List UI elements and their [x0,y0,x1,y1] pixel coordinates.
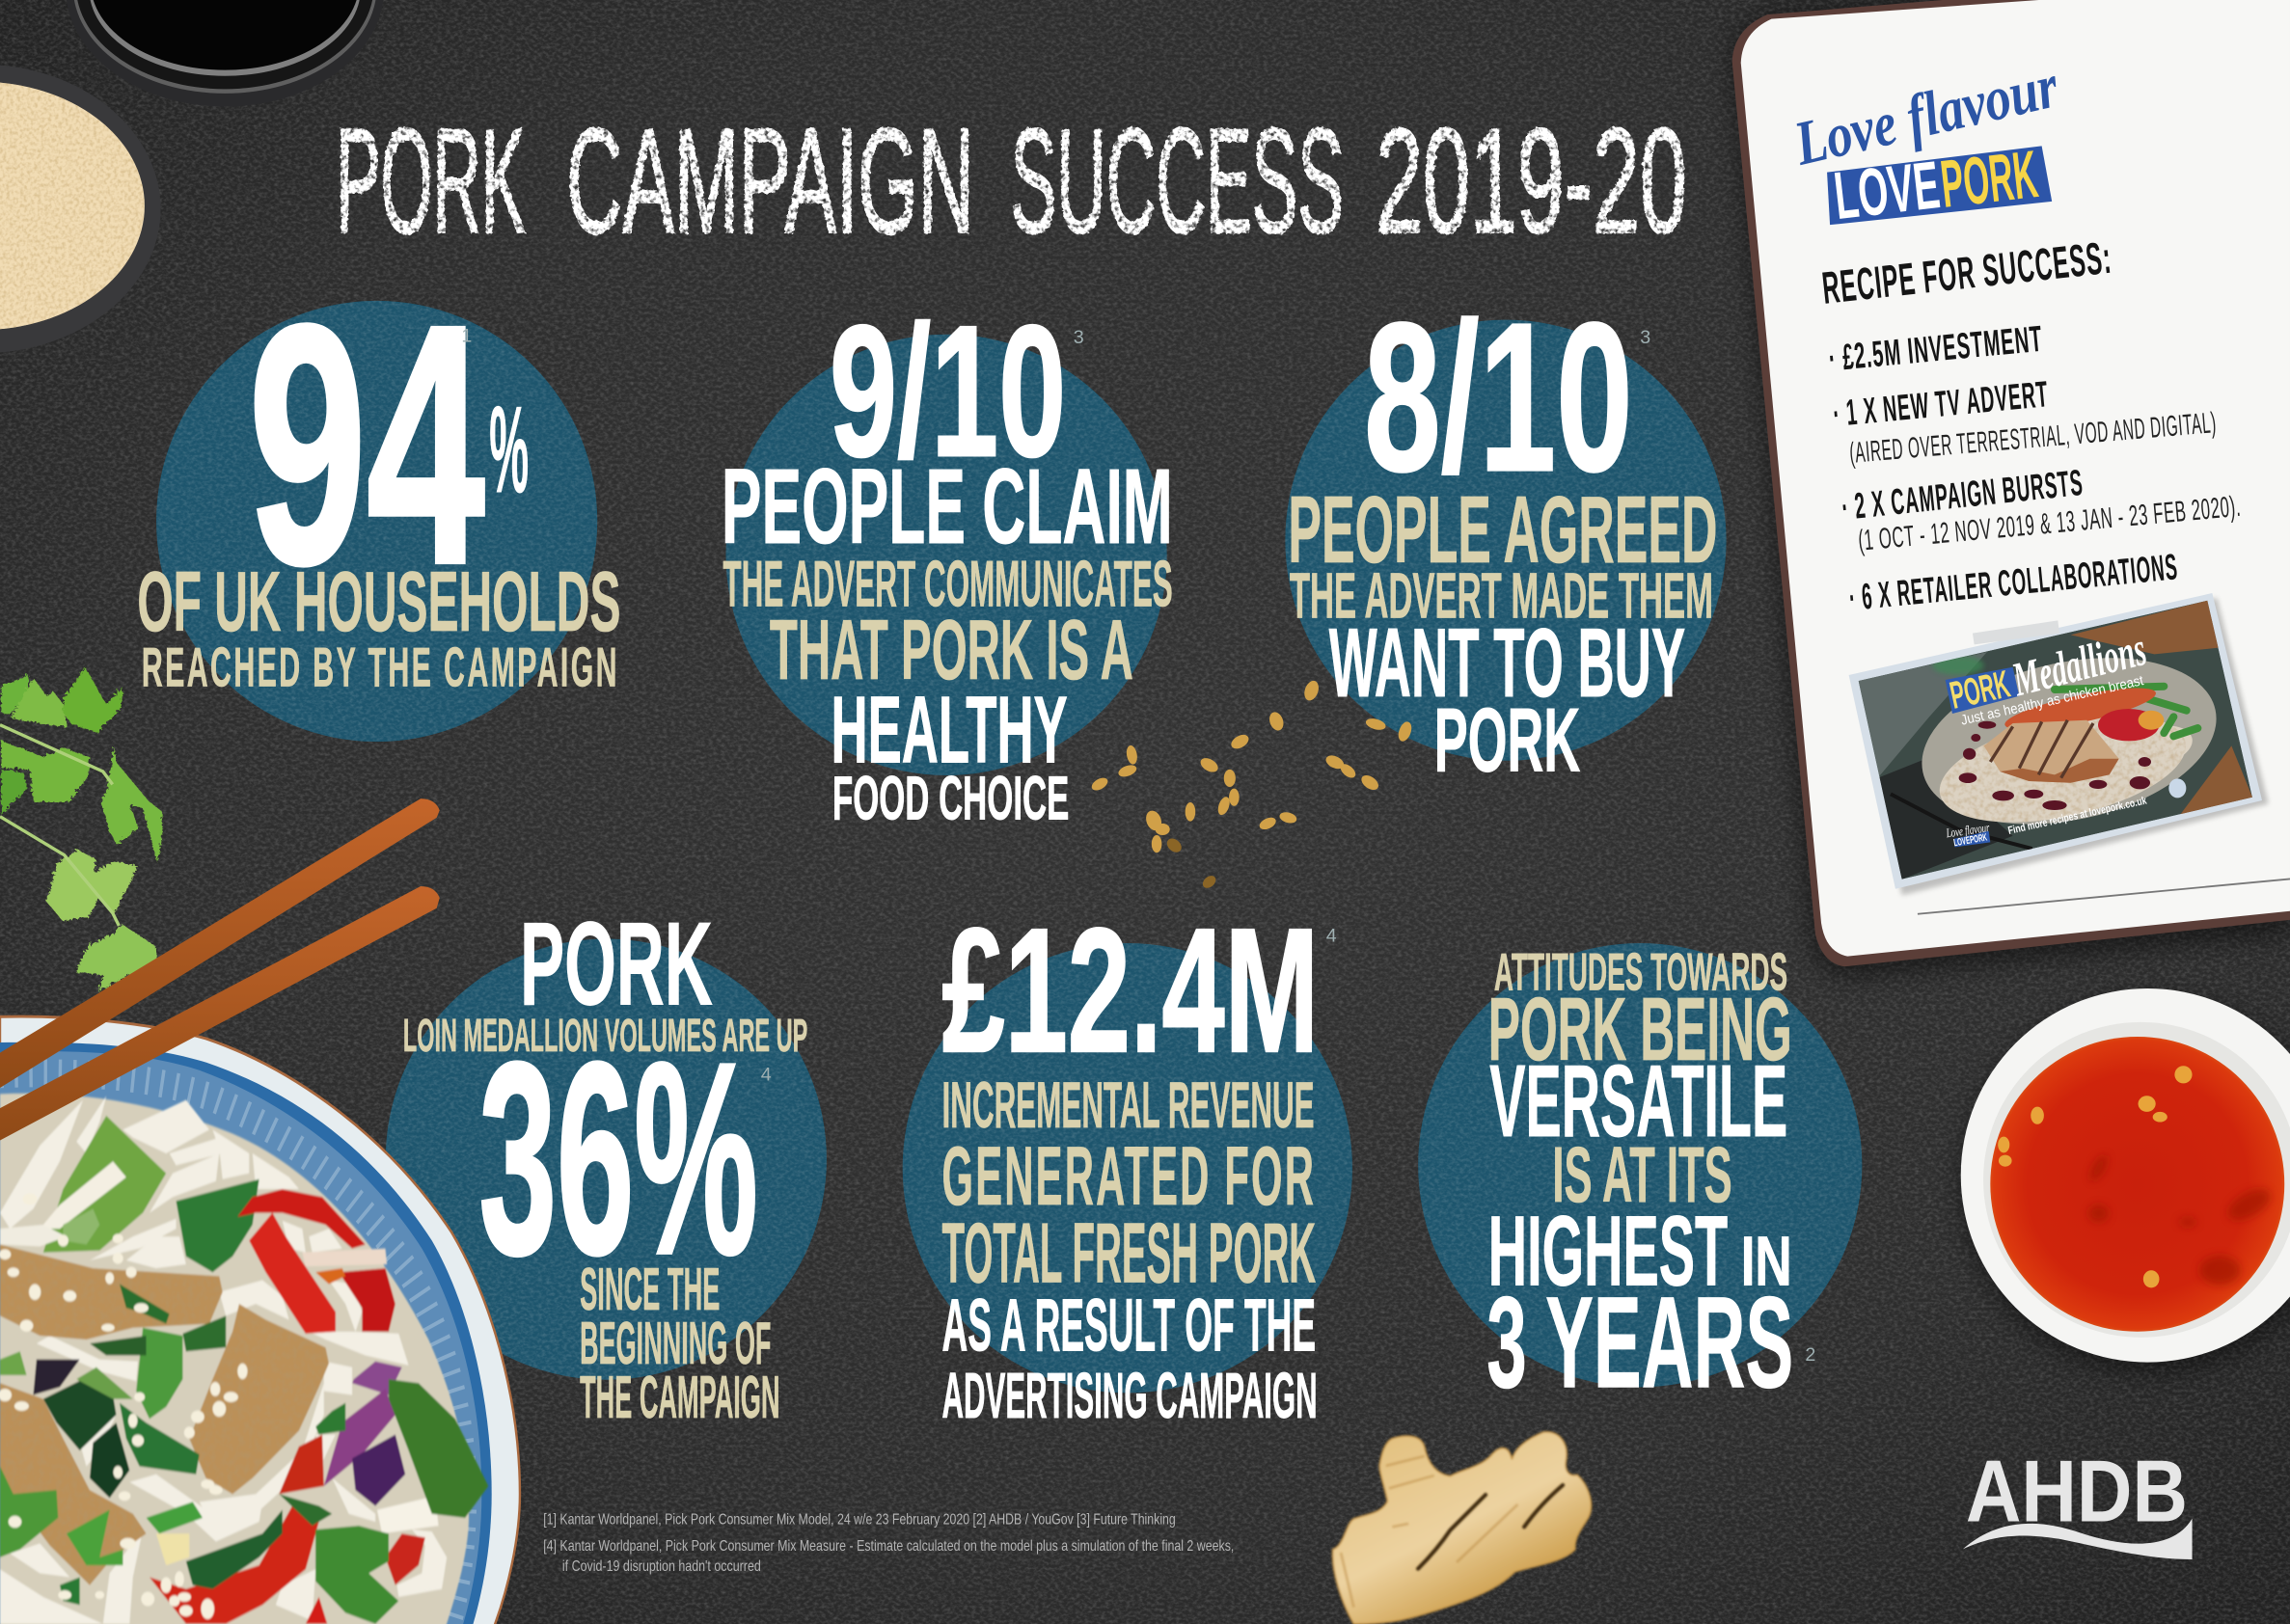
stat panel: pork loin medallions up 36%: SINCE THE [580,1257,720,1323]
handwritten recipe list: · 1 X NEW TV ADVERT [1832,374,2051,435]
title [336,97,1687,264]
stat panel: versatile attitudes: IN [1741,1222,1792,1300]
footnotes: [1] Kantar Worldpanel, Pick Pork Consumer Mix Model, 24 w/e 23 February 2020 [2] AHDB / YouGov [3] Future Thinking [543,1512,1176,1529]
stat panel: versatile attitudes: VERSATILE [1489,1044,1787,1158]
stat panel: 8/10 want to buy: PORK [1434,689,1580,790]
taped recipe photo: Just as healthy as chicken breast [1959,673,2145,729]
handwritten recipe list [1819,232,2243,619]
handwritten recipe list: · £2.5M INVESTMENT [1827,319,2044,380]
stat panel: £12.4M incremental revenue: £12.4M [942,891,1319,1089]
taped recipe photo: Medallions [2006,621,2151,707]
brand logo: Love Flavour Love Pork: PORK [1937,136,2041,222]
stat panel: 8/10 want to buy [1288,279,1717,790]
stat panel: 94% of UK households: REACHED BY THE CAMPAIGN [142,637,619,699]
stat panel: 8/10 want to buy: PEOPLE AGREED [1288,476,1717,582]
text: INCREMENTAL REVENUE [942,1069,1315,1142]
brand logo: Love Flavour Love Pork: LOVE [1831,147,1944,233]
stat panel: versatile attitudes: HIGHEST [1488,1195,1728,1306]
stat panel: 8/10 want to buy: WANT TO BUY [1329,609,1685,717]
stat panel: versatile attitudes: PORK BEING [1488,979,1792,1079]
footnotes [543,1512,1234,1575]
stat panel: £12.4M incremental revenue: 4 [1326,926,1337,947]
stat panel: 9/10 healthy: 9/10 [830,287,1066,496]
stat panel: 9/10 healthy: PEOPLE CLAIM [722,447,1173,566]
title: PORK [336,97,526,264]
stat panel: versatile attitudes: 2 [1805,1344,1815,1366]
peppers [339,1268,395,1332]
footnotes: [4] Kantar Worldpanel, Pick Pork Consumer Mix Measure - Estimate calculated on the model plus a simulation of the final 2 weeks, [543,1538,1234,1555]
greens [43,1116,166,1253]
taped recipe photo: Love flavour [1945,820,1991,840]
text: TOTAL FRESH PORK [942,1205,1316,1300]
title: SUCCESS [1011,97,1344,264]
AHDB logo: AHDB [1966,1444,2188,1541]
stat panel: pork loin medallions up 36%: 4 [761,1064,772,1085]
stat panel: pork loin medallions up 36%: 36% [479,1006,758,1311]
icon: sesame seed bowl [0,65,161,353]
icon: chopsticks [0,798,440,1140]
pork [0,1244,329,1585]
brand logo: Love Flavour Love Pork [1787,51,2065,233]
stat panel: £12.4M incremental revenue: AS A RESULT OF THE [942,1284,1316,1367]
title: CAMPAIGN [566,97,974,264]
text: THE ADVERT COMMUNICATES [722,547,1173,620]
icon: sweet chilli sauce bowl [1960,988,2290,1374]
text: THE CAMPAIGN [580,1365,779,1431]
stat panel: 94% of UK households: 94 [248,255,486,635]
stat panel: 94% of UK households: % [489,381,529,518]
text: LOIN MEDALLION VOLUMES ARE UP [403,1010,807,1062]
stat panel: 9/10 healthy: THAT PORK IS A [770,603,1133,697]
stat panel: versatile attitudes: ATTITUDES TOWARDS [1494,943,1787,1002]
stat panel: £12.4M incremental revenue [942,891,1337,1432]
sesame seeds [0,1194,248,1619]
stat panel: 9/10 healthy: HEALTHY [831,676,1068,782]
taped recipe photo: PORK [1947,663,2014,717]
stat panel: 94% of UK households [137,255,620,699]
stat panel: versatile attitudes [1486,943,1815,1415]
stat panel: pork loin medallions up 36%: BEGINNING OF [580,1311,771,1377]
stat panel: 8/10 want to buy: 3 [1640,327,1650,348]
stat panel: 8/10 want to buy: THE ADVERT MADE THEM [1290,560,1713,632]
stat panel: pork loin medallions up 36%: PORK [520,898,713,1030]
stat panel: versatile attitudes: IS AT ITS [1552,1131,1732,1219]
teal background circles [156,301,1862,1393]
stat panel: pork loin medallions up 36% [403,898,807,1431]
taped recipe photo: Find more recipes at lovepork.co.uk [2007,795,2148,837]
title: 2019-20 [1376,97,1687,264]
stat panel: 9/10 healthy: FOOD CHOICE [832,764,1069,832]
taped recipe photo: LOVEPORK [1952,831,1988,849]
stat panel: 9/10 healthy [722,287,1173,832]
icon: noodle bowl [0,1016,520,1624]
icon: soy sauce dish [66,0,384,107]
stat panel: 94% of UK households: OF UK HOUSEHOLDS [137,555,620,649]
brand logo: Love Flavour Love Pork: Love flavour [1787,51,2065,179]
footnotes: if Covid-19 disruption hadn't occurred [562,1558,761,1575]
stat panel: £12.4M incremental revenue: GENERATED FOR [942,1130,1316,1223]
notebook [1732,0,2290,978]
stat panel: 9/10 healthy: 3 [1074,327,1084,348]
icon: ginger root [1333,1432,1591,1624]
stat panel: versatile attitudes: 3 YEARS [1486,1269,1793,1415]
icon: coriander sprig [0,665,161,990]
stat panel: 8/10 want to buy: 8/10 [1364,279,1633,516]
icon: sesame seeds [1090,679,1414,890]
noodles [0,1096,447,1624]
herbs and cabbage [136,1328,182,1419]
stat panel: 94% of UK households: 1 [461,325,472,346]
taped recipe photo [1849,593,2269,895]
text: ADVERTISING CAMPAIGN [942,1361,1318,1432]
